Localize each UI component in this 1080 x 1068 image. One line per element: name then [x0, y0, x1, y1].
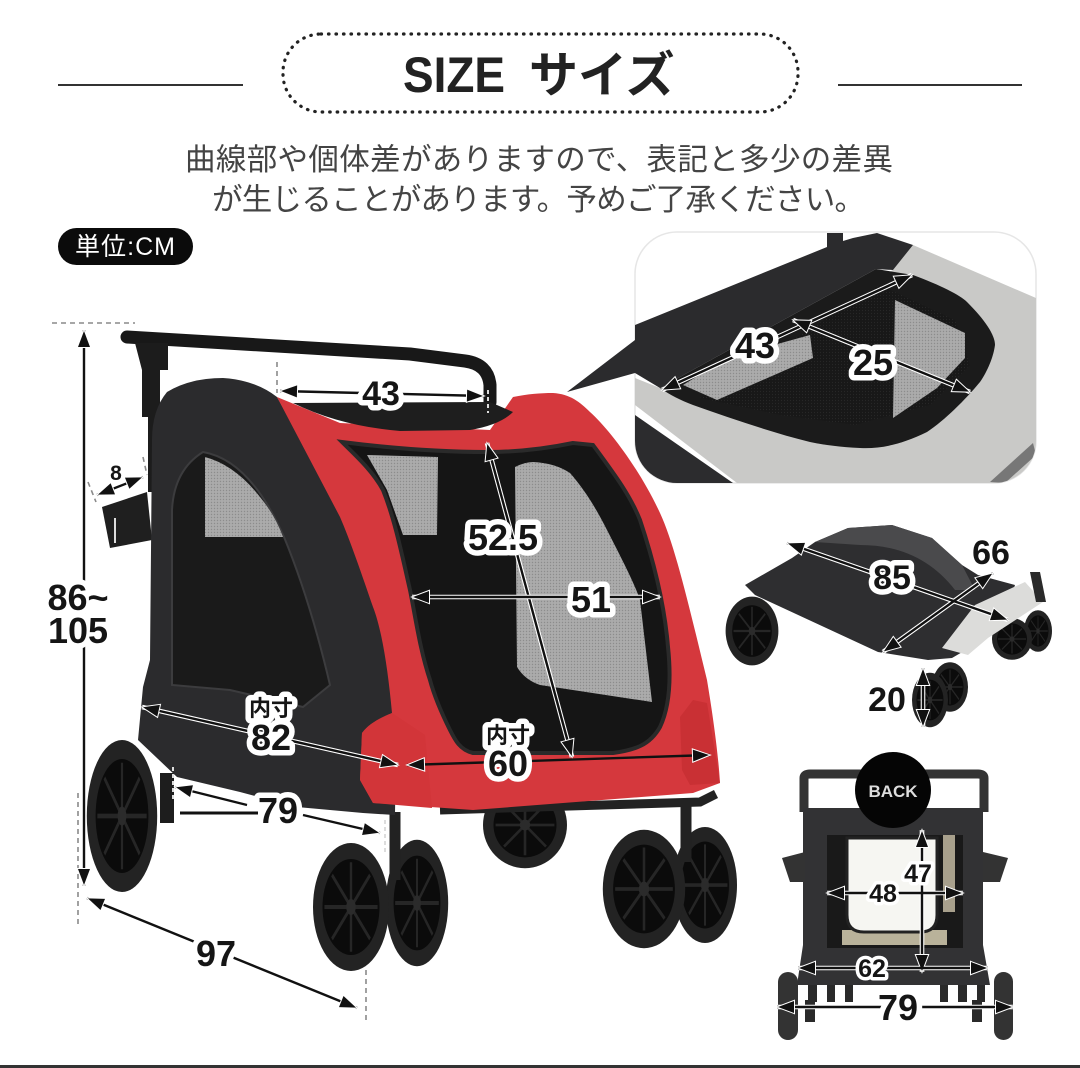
side mesh — [172, 452, 330, 707]
bottom strip — [0, 1065, 1080, 1068]
folded dimensions: 20 — [868, 681, 906, 719]
back dimensions: 79 — [878, 987, 918, 1028]
main dimension: window height — [468, 443, 572, 757]
main dimension: height: 86~ — [47, 577, 109, 618]
note text: 曲線部や個体差がありますので、表記と多少の差異 — [185, 143, 893, 177]
top opening — [293, 402, 513, 431]
back view — [777, 752, 1013, 1040]
title: サイズ — [529, 49, 675, 103]
back dimensions: 47 — [904, 860, 932, 888]
unit badge — [58, 228, 193, 265]
main dimension: window height: 52.5 — [468, 517, 538, 558]
main dimension: interior 82: 82 — [251, 717, 291, 758]
handle — [127, 337, 490, 402]
folded dimensions — [787, 534, 1010, 727]
main dimension: handle: 43 — [362, 375, 400, 413]
folded dimensions: 85 — [873, 559, 911, 597]
main dimension: interior 82 — [142, 696, 398, 765]
frame — [160, 773, 174, 823]
main dimension: window width: 51 — [571, 579, 611, 620]
red pockets — [360, 713, 432, 808]
main dimension: interior 60: 内寸 — [486, 723, 530, 748]
main dimension: cup — [88, 457, 147, 502]
rear wheel — [87, 740, 157, 892]
main dimension: height: 105 — [48, 610, 108, 651]
cup holder — [102, 492, 152, 548]
wheels — [313, 782, 737, 971]
inset dimensions — [662, 275, 970, 392]
black side panel — [138, 378, 396, 815]
main dimension: length: 97 — [196, 933, 236, 974]
main dimension: interior 60: 60 — [488, 743, 528, 784]
inset: window detail — [567, 232, 1036, 483]
title — [283, 34, 798, 112]
main dimension: handle — [277, 362, 488, 413]
back badge: BACK — [868, 782, 918, 801]
note text — [185, 143, 893, 217]
back dimensions: 48 — [869, 880, 897, 908]
front mesh window — [342, 442, 670, 753]
red body — [277, 393, 720, 810]
folded dimensions: 66 — [972, 534, 1010, 572]
inset dimensions: 43 — [735, 325, 775, 366]
main dimension: interior 60 — [407, 723, 710, 784]
main dimension: cup: 8 — [110, 462, 122, 485]
inset dimensions: 25 — [853, 342, 893, 383]
main stroller — [87, 337, 737, 971]
main dimension: wheelbase — [173, 767, 385, 853]
folded stroller — [726, 525, 1052, 727]
back dimensions — [777, 830, 1013, 1028]
unit badge: 単位:CM — [75, 233, 175, 261]
main dimension: wheelbase: 79 — [258, 790, 298, 831]
back badge — [855, 752, 931, 828]
back dimensions: 62 — [858, 955, 886, 983]
title: SIZE — [403, 47, 505, 103]
note text: が生じることがあります。予めご了承ください。 — [212, 183, 865, 217]
main dimension: length — [87, 898, 366, 1023]
main dimension: interior 82: 内寸 — [249, 696, 293, 721]
main dimension: height — [47, 323, 135, 928]
